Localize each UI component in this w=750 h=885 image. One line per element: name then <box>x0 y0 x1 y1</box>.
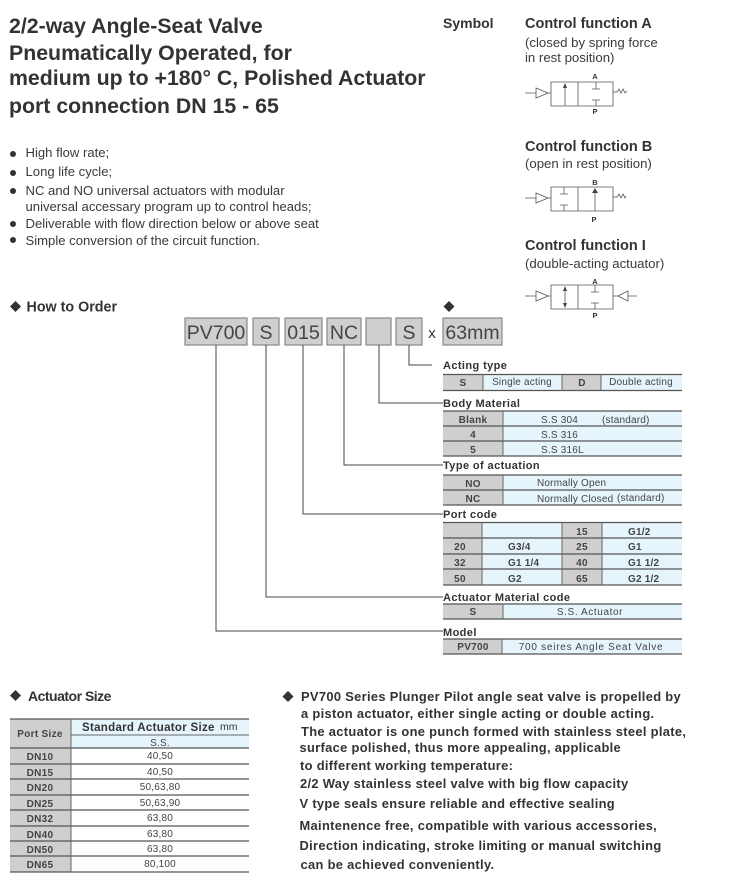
symbol I schematic: A <box>592 277 598 286</box>
table: port code: G1/2 <box>628 527 651 538</box>
feature bullet list: High flow rate; <box>26 145 109 160</box>
actuator size table: DN50 <box>27 845 54 856</box>
table: port code: G1 1/2 <box>628 558 659 569</box>
actuator size table: 80,100 <box>144 859 176 870</box>
table: port code: G1 <box>628 542 642 553</box>
table: body material: 4 <box>470 430 476 441</box>
actuator size table: DN32 <box>27 814 54 825</box>
product description: surface polished, thus more appealing, applicable <box>300 740 621 755</box>
product description: Maintenence free, compatible with various accessories, <box>300 818 657 833</box>
feature bullet list: Long life cycle; <box>26 164 112 179</box>
table: port code: 65 <box>576 574 588 585</box>
feature bullet list <box>10 145 319 248</box>
table: port code: G3/4 <box>508 542 531 553</box>
table: port code: 40 <box>576 558 588 569</box>
title: port connection DN 15 - 65 <box>9 94 279 118</box>
table: port code: 50 <box>454 574 466 585</box>
actuator size table: DN10 <box>27 752 54 763</box>
product description <box>282 689 686 872</box>
actuator size table: 63,80 <box>147 813 173 824</box>
product description: a piston actuator, either single acting or double acting. <box>301 706 654 721</box>
actuator size table: 50,63,90 <box>140 798 180 809</box>
table: body material: S.S 304 <box>541 415 578 426</box>
table: type of actuation <box>443 460 682 505</box>
table: type of actuation: (standard) <box>617 493 665 504</box>
actuator size table: DN65 <box>27 860 54 871</box>
control function B: Control function B <box>525 139 652 155</box>
control function A <box>525 16 658 116</box>
symbol A schematic: P <box>592 107 598 116</box>
order code boxes: S <box>402 322 416 344</box>
control function I: (double-acting actuator) <box>525 256 664 271</box>
control function A: (closed by spring force <box>525 35 658 50</box>
order code boxes <box>185 301 502 345</box>
table: body material: Blank <box>459 415 488 426</box>
table: port code: 15 <box>576 527 588 538</box>
control function B <box>525 139 652 224</box>
control function B: (open in rest position) <box>525 156 652 171</box>
product description: V type seals ensure reliable and effective sealing <box>300 796 615 811</box>
table: type of actuation: NC <box>465 494 481 505</box>
table: type of actuation: NO <box>465 479 481 490</box>
table: model: 700 seires Angle Seat Valve <box>519 642 663 653</box>
symbol I schematic <box>525 277 637 320</box>
actuator size table: 63,80 <box>147 829 173 840</box>
how to order heading: How to Order <box>26 300 117 316</box>
actuator size table: DN20 <box>27 783 54 794</box>
actuator size table: S.S. <box>150 738 170 749</box>
actuator size table: DN15 <box>27 768 54 779</box>
table: port code: 32 <box>454 558 466 569</box>
table: body material: S.S 316 <box>541 430 578 441</box>
table: acting type: D <box>578 378 586 389</box>
feature bullet list: Deliverable with flow direction below or above seat <box>26 216 319 231</box>
table: port code: Port code <box>443 509 497 521</box>
table: actuator material code <box>443 592 682 619</box>
actuator size table: 40,50 <box>147 767 173 778</box>
table: port code: G2 <box>508 574 522 585</box>
table: body material <box>443 398 682 456</box>
product description: Direction indicating, stroke limiting or manual switching <box>300 838 662 853</box>
table: actuator material code: S.S. Actuator <box>557 607 623 618</box>
actuator size table: DN40 <box>27 830 54 841</box>
table: acting type: Single acting <box>492 377 552 388</box>
table: type of actuation: Normally Closed <box>537 494 613 505</box>
symbol B schematic: P <box>591 215 597 224</box>
symbol B schematic <box>525 178 626 224</box>
actuator size table: mm <box>220 721 238 733</box>
table: model: Model <box>443 627 477 639</box>
product description: PV700 Series Plunger Pilot angle seat valve is propelled by <box>301 689 681 704</box>
symbol A schematic <box>525 72 627 116</box>
table: actuator material code: S <box>470 607 477 618</box>
table: body material: 5 <box>470 445 476 456</box>
feature bullet list: Simple conversion of the circuit function. <box>26 233 260 248</box>
feature bullet list: NC and NO universal actuators with modular <box>26 183 285 198</box>
table: model: PV700 <box>457 642 489 653</box>
order code boxes: NC <box>330 322 358 344</box>
title: Pneumatically Operated, for <box>9 41 292 65</box>
order code boxes: x <box>428 325 436 342</box>
table: acting type: S <box>460 378 467 389</box>
table: port code: 20 <box>454 542 466 553</box>
table: port code: G1 1/4 <box>508 558 539 569</box>
order code boxes: 63mm <box>445 322 500 344</box>
symbol heading: Symbol <box>443 15 494 31</box>
feature bullet list: universal accessary program up to control heads; <box>26 199 312 214</box>
actuator size heading: Actuator Size <box>28 688 112 704</box>
table: acting type <box>443 360 682 391</box>
product description: The actuator is one punch formed with stainless steel plate, <box>301 724 686 739</box>
symbol B schematic: B <box>592 178 598 187</box>
table: type of actuation: Type of actuation <box>443 460 540 472</box>
actuator size table: 50,63,80 <box>140 782 180 793</box>
actuator size table: Standard Actuator Size <box>82 722 215 734</box>
actuator size table: 63,80 <box>147 844 173 855</box>
order code leader lines <box>216 345 443 631</box>
actuator size table: DN25 <box>27 799 54 810</box>
table: body material: S.S 316L <box>541 445 584 456</box>
table: body material: (standard) <box>602 415 650 426</box>
table: port code: G2 1/2 <box>628 574 659 585</box>
control function I <box>525 238 664 320</box>
order code boxes: 015 <box>287 322 320 344</box>
table: model <box>443 627 682 654</box>
table: port code <box>443 509 682 585</box>
actuator size table: 40,50 <box>147 751 173 762</box>
title: medium up to +180° C, Polished Actuator <box>9 66 426 90</box>
actuator size table <box>10 719 249 872</box>
product description: to different working temperature: <box>300 758 513 773</box>
symbol A schematic: A <box>592 72 598 81</box>
product description: 2/2 Way stainless steel valve with big flow capacity <box>300 776 629 791</box>
table: port code: 25 <box>576 542 588 553</box>
table: type of actuation: Normally Open <box>537 478 606 489</box>
control function A: Control function A <box>525 16 652 32</box>
table: actuator material code: Actuator Material code <box>443 592 570 604</box>
control function I: Control function I <box>525 238 646 254</box>
symbol I schematic: P <box>592 311 598 320</box>
order code boxes: PV700 <box>187 322 245 344</box>
table: body material: Body Material <box>443 398 520 410</box>
table: acting type: Double acting <box>609 377 673 388</box>
product description: can be achieved conveniently. <box>300 857 494 872</box>
table: acting type: Acting type <box>443 360 507 372</box>
title <box>9 14 426 118</box>
order code boxes: S <box>259 322 273 344</box>
title: 2/2-way Angle-Seat Valve <box>9 14 263 38</box>
actuator size table: Port Size <box>17 729 63 740</box>
control function A: in rest position) <box>525 50 614 65</box>
